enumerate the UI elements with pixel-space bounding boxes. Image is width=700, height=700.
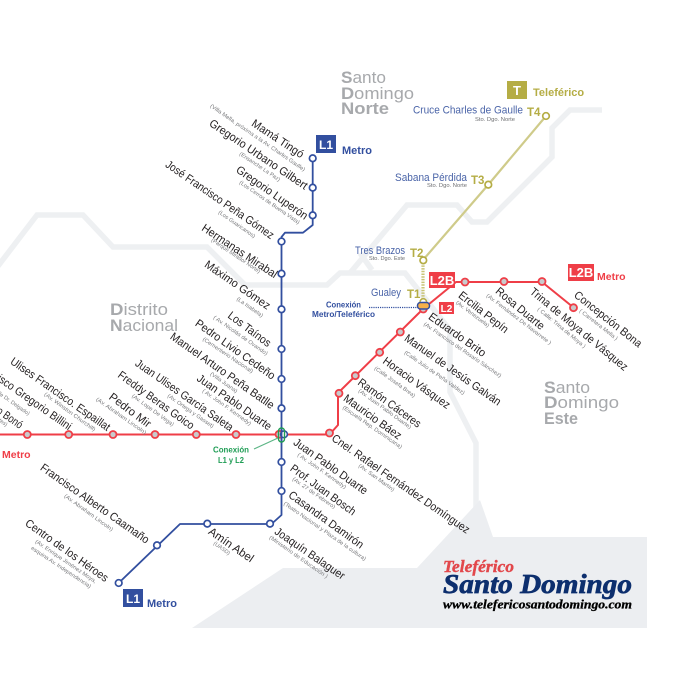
station label: Centro de los Héroes: esquina Av. Independencia) — [29, 546, 92, 590]
station label: Amín Abel: (UASD) — [212, 541, 231, 557]
station label: Juan Ulises García Saleta: Juan Ulises García Saleta — [133, 358, 236, 434]
station label: Ulises Francisco Espaillat: (Av. Winston Churchill) — [43, 392, 96, 433]
station label: Hermanas Mirabal: Hermanas Mirabal — [199, 222, 279, 281]
legend: L1 Metro top: Metro — [342, 145, 372, 157]
station label: Los Taínos: ( Av. Nicolás de Ovando) — [212, 315, 269, 357]
teleférico station: Cruce Charles de Gaulle: Cruce Charles de Gaulle — [413, 104, 523, 116]
zone label: Distrito Nacional — [110, 300, 178, 335]
station label: Horacio Vásquez: (Calle Josefa Brea) — [373, 366, 416, 399]
callout: Conexión Metro/Teleférico: Metro/Teleférico — [312, 310, 375, 319]
legend: Teleférico: Teleférico — [533, 87, 584, 99]
station label: Freddy Beras Goico: (Av. Lope De Vega) — [130, 393, 175, 428]
zone label: Santo Domingo Este: Este — [544, 409, 578, 428]
station label: Pedro Livio Cedeño: (Cementerio Nacional) — [201, 337, 254, 375]
station label: Hermanas Mirabal: (Parque Mirador Norte) — [210, 238, 261, 275]
logo: Teleférico Santo Domingo: Teleférico — [443, 557, 514, 576]
station label: Máximo Gómez: Máximo Gómez — [202, 259, 272, 313]
station label: Mamá Tingó: Mamá Tingó — [249, 118, 306, 161]
metro line 1 — [119, 158, 313, 583]
teleférico station: Cruce Charles de Gaulle — [413, 104, 541, 123]
station label: Rosa Duarte: (Av. Fernández De Navarrete ) — [485, 293, 552, 346]
station label: Trina de Moya de Vásquez: ( Calle: Trina de Moya ) — [536, 307, 587, 350]
station label: José Francisco Peña Gómez: José Francisco Peña Gómez — [163, 159, 276, 242]
station label: Joaquín Balaguer: (Ministerio de Educación ) — [268, 535, 329, 580]
station label: Manuel de Jesús Galván: (Calle Julio de Peña Valdez) — [403, 350, 466, 397]
zone label: Distrito Nacional: Nacional — [110, 316, 178, 335]
station label: Pedro Mir: Pedro Mir — [106, 391, 153, 431]
station label: Mauricio Báez: Mauricio Báez — [341, 393, 404, 443]
station label: Ramón Cáceres: (Av. Juan Pablo Duarte) — [357, 388, 412, 431]
station label: Manuel Arturo Peña Batlle: Manuel Arturo Peña Batlle — [168, 331, 276, 412]
badge: L2B: L2B — [430, 273, 454, 288]
teleférico station: Gualey — [371, 287, 421, 301]
logo: Teleférico Santo Domingo: Santo Domingo — [443, 569, 632, 599]
legend: L1 Metro bottom: L1 — [126, 592, 140, 606]
station label: Ercilia Pepín: Ercilia Pepín — [456, 290, 510, 336]
teleférico station: Sabana Pérdida: Sto. Dgo. Norte — [427, 183, 467, 189]
station label: Centro de los Héroes: Centro de los Héroes — [23, 518, 110, 585]
station label: Manuel de Jesús Galván: Manuel de Jesús Galván — [402, 333, 503, 408]
zone label: Santo Domingo Norte: Domingo — [341, 84, 414, 103]
teleférico station: Sabana Pérdida — [395, 172, 484, 189]
stations: line 1 — [115, 155, 316, 586]
station label: Rosa Duarte: Rosa Duarte — [493, 285, 546, 333]
connector: dotted metro/teleférico — [369, 306, 418, 308]
station label: Juan Pablo Duarte (south): Juan Pablo Duarte — [291, 437, 370, 497]
teleférico station: Tres Brazos: T2 — [410, 248, 423, 260]
station label: Juan Ulises García Saleta: (Av. Ortega y Gasset) — [166, 393, 215, 430]
station label: Joaquín Balaguer: Joaquín Balaguer — [272, 526, 347, 583]
station label: Concepción Bona: ( Carretera Mella ) — [578, 308, 619, 342]
callout: Conexión L1 y L2: Conexión — [213, 446, 249, 455]
station label: Pedro Mir: (Av. Abraham Lincoln) — [94, 397, 147, 436]
legend: Teleférico — [507, 81, 584, 99]
station label: Ulises Francisco Espaillat: Ulises Francisco. Espaillat — [8, 356, 113, 434]
station label: Prof. Juan Bosch: Prof. Juan Bosch — [288, 463, 358, 518]
station label: Prof. Juan Bosch: (Av. 27 de Febrero) — [291, 477, 336, 511]
station label: Casandra Damirón: Casandra Damirón — [286, 489, 366, 551]
station label: Francisco Alberto Caamaño: Francisco Alberto Caamaño — [38, 462, 151, 546]
zone label: Santo Domingo Este: Domingo — [544, 393, 619, 412]
background: road network — [0, 110, 647, 628]
station label: Amín Abel: Amín Abel — [206, 526, 256, 565]
station label: Concepción Bona: Concepción Bona — [571, 289, 644, 351]
teleférico station: Sabana Pérdida: Sabana Pérdida — [395, 172, 468, 184]
station label: Freddy Beras Goico: Freddy Beras Goico — [115, 369, 196, 432]
station label: Pedro Mir — [94, 391, 153, 436]
station label: Gregorio Urbano Gilbert: (Ensanche La Paz) — [238, 151, 281, 183]
station label: Ramón Cáceres: Ramón Cáceres — [355, 377, 423, 431]
teleférico station: Tres Brazos: Tres Brazos — [355, 245, 405, 257]
zone label: Santo Domingo Este: Santo — [544, 378, 590, 397]
interchange: Gualey metro/teleférico — [418, 299, 430, 312]
legend: L1 Metro top — [316, 135, 372, 157]
legend: L1 Metro bottom: Metro — [147, 598, 177, 610]
station label: Mamá Tingó: (Villa Mella, próxima a la Av. Charles Gaulle) — [209, 104, 306, 173]
station label: Horacio Vásquez: Horacio Vásquez — [380, 355, 452, 412]
stations: teleférico — [420, 113, 549, 264]
badge: L2: L2 — [441, 304, 453, 315]
callout: Conexión Metro/Teleférico: Conexión — [326, 300, 361, 309]
callout: Conexión Metro/Teleférico — [312, 300, 375, 319]
zone label: Santo Domingo Norte — [341, 68, 414, 118]
station label: Cnel. Rafael Fernández Domínguez: Cnel. Rafael Fernández Domínguez — [329, 433, 472, 537]
station label: Trina de Moya de Vásquez: Trina de Moya de Vásquez — [527, 286, 630, 374]
teleférico station: Tres Brazos — [355, 245, 423, 262]
station label: Mauricio Báez: (Escuela Rep. Dominicana) — [341, 405, 403, 451]
station label: Centro de los Héroes: (Av. Enrique Jiménez Moya, — [34, 539, 98, 585]
stations: line 2 — [24, 278, 577, 438]
station label: Gregorio Urbano Gilbert: Gregorio Urbano Gilbert — [207, 118, 310, 193]
zone label: Santo Domingo Este — [544, 378, 619, 428]
station label: Juan Pablo Duarte (north): ( Av. John F. Kennedy) — [201, 388, 252, 427]
teleférico station: Cruce Charles de Gaulle: T4 — [527, 107, 541, 119]
legend: Metro left: Metro — [2, 449, 31, 461]
legend: L2B top right: L2B — [569, 265, 593, 280]
station label: Juan Pablo Duarte (north): Juan Pablo Duarte — [194, 373, 274, 433]
station label: Los Taínos: Los Taínos — [225, 310, 273, 350]
station label: Manuel Arturo Peña Batlle: (Villa Juana) — [209, 371, 238, 395]
legend: L2B top right — [568, 264, 626, 283]
station label: José Francisco Peña Gómez: (Los Guaricanos) — [217, 210, 256, 240]
zone label: Distrito Nacional: Distrito — [110, 300, 168, 319]
callout: Conexión L1 y L2: L1 y L2 — [218, 456, 245, 465]
station label: Francisco Alberto Caamaño: (Av. Abraham Lincoln) — [63, 493, 114, 533]
station label: Casandra Damirón: (Teatro Nacional y Plaza de la cultura) — [282, 501, 367, 563]
logo: Teleférico Santo Domingo: www.telefericosantodomingo.com — [443, 598, 632, 612]
station label: Eduardo Brito: (Av. Francisco del Rosario Sánchez) — [422, 322, 502, 379]
callout: Conexión L1 y L2 — [213, 446, 249, 465]
station label: Cnel. Rafael Fernández Domínguez: (Av. San Martín) — [357, 463, 395, 493]
logo: Teleférico Santo Domingo — [443, 557, 632, 612]
station label: Gregorio Luperón: (Los Cerros de Buena Vista) — [238, 180, 301, 226]
station label: Juan Pablo Duarte (south): ( Av. John F. Kennedy) — [296, 452, 347, 491]
legend: L1 Metro bottom — [123, 589, 177, 610]
station label: Pedro Livio Cedeño: Pedro Livio Cedeño — [193, 318, 277, 382]
zone label: Santo Domingo Norte: Santo — [341, 68, 386, 87]
metro line 2 — [0, 282, 574, 434]
station label: Eduardo Brito: Eduardo Brito — [426, 311, 488, 360]
badge: L2 — [439, 302, 454, 315]
teleférico station: Cruce Charles de Gaulle: Sto. Dgo. Norte — [475, 117, 515, 123]
station label: Máximo Gómez: (La Isabela) — [235, 296, 264, 319]
teleférico line — [423, 116, 546, 303]
station label: Ercilia Pepín: (Av. Venezuela) — [454, 300, 490, 329]
teleférico station: Tres Brazos: Sto. Dgo. Este — [369, 256, 405, 262]
interchange: L1 and L2 — [276, 428, 287, 442]
legend: L2B top right: Metro — [597, 271, 626, 283]
legend: Teleférico: T — [513, 83, 521, 98]
teleférico station: Gualey: Gualey — [371, 287, 401, 299]
connector: L1 y L2 — [254, 438, 278, 449]
teleférico station: Gualey: T1 — [407, 289, 421, 301]
legend: L1 Metro top: L1 — [319, 138, 333, 152]
station label: Gregorio Luperón: Gregorio Luperón — [234, 164, 310, 223]
teleférico station: Sabana Pérdida: T3 — [471, 175, 484, 187]
station label: Pedro Francisco Bonó — [0, 370, 25, 432]
zone label: Santo Domingo Norte: Norte — [341, 99, 389, 118]
